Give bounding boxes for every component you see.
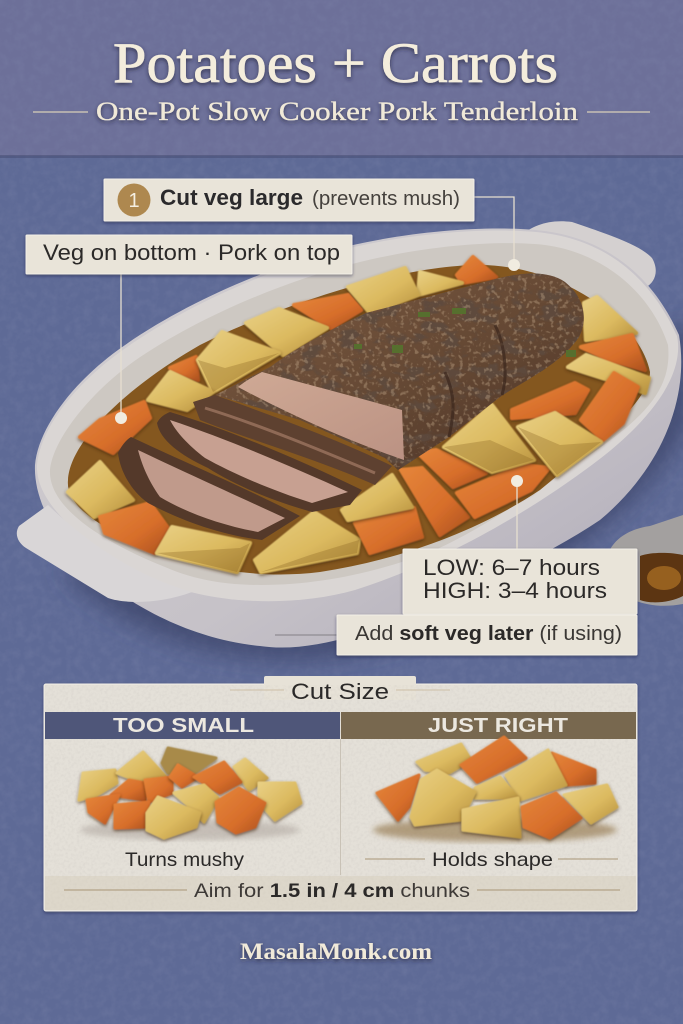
panel tab bbox=[264, 676, 416, 700]
callout: cut veg large: Cut veg large bbox=[160, 185, 303, 210]
step number badge bbox=[118, 184, 150, 216]
spoon bbox=[606, 515, 683, 606]
dish body bbox=[35, 229, 681, 648]
column: just right bbox=[340, 712, 636, 875]
vegetable facet shading bbox=[157, 353, 601, 572]
title: Potatoes + Carrots bbox=[113, 32, 558, 95]
pork roast bbox=[215, 274, 584, 470]
callout: soft veg: Add soft veg later (if using) bbox=[355, 623, 622, 645]
footer brand: MasalaMonk.com bbox=[240, 939, 432, 964]
large vegetable pile bbox=[373, 737, 617, 842]
column: just right: Holds shape bbox=[432, 849, 553, 871]
subtitle: One-Pot Slow Cooker Pork Tenderloin bbox=[96, 97, 578, 126]
dish inner wall bbox=[50, 243, 668, 585]
callout: soft veg bbox=[275, 615, 637, 655]
callout: cooking time bbox=[403, 475, 637, 614]
panel: cut size bbox=[44, 676, 637, 911]
vegetables bbox=[68, 257, 649, 572]
small vegetable pile bbox=[79, 748, 301, 840]
callout: cooking time: HIGH: 3–4 hours bbox=[423, 578, 607, 603]
pork slices bbox=[118, 395, 392, 540]
left handle bbox=[17, 505, 192, 602]
aim for note: Aim for 1.5 in / 4 cm chunks bbox=[194, 880, 470, 902]
roast char texture bbox=[218, 274, 584, 468]
callout: cut veg large bbox=[104, 179, 520, 271]
sauce bed bbox=[68, 265, 650, 574]
callout: layering bbox=[26, 235, 352, 424]
column: too small bbox=[45, 712, 340, 871]
callout: layering: Veg on bottom · Pork on top bbox=[43, 240, 340, 265]
aim strip bbox=[45, 876, 636, 910]
callout: cooking time: LOW: 6–7 hours bbox=[423, 555, 600, 580]
callout: cut veg large: (prevents mush) bbox=[312, 188, 460, 210]
column: too small: Turns mushy bbox=[125, 849, 244, 871]
step number badge: 1 bbox=[128, 190, 140, 212]
right handle bbox=[520, 221, 656, 288]
dish rim bbox=[37, 231, 678, 601]
column: just right: JUST RIGHT bbox=[428, 715, 568, 737]
column: too small: TOO SMALL bbox=[113, 715, 254, 737]
panel heading: Cut Size bbox=[291, 679, 389, 704]
header band bbox=[0, 0, 683, 158]
dish shadow bbox=[60, 320, 683, 660]
illustration: baking dish with pork and vegetables bbox=[17, 221, 683, 660]
